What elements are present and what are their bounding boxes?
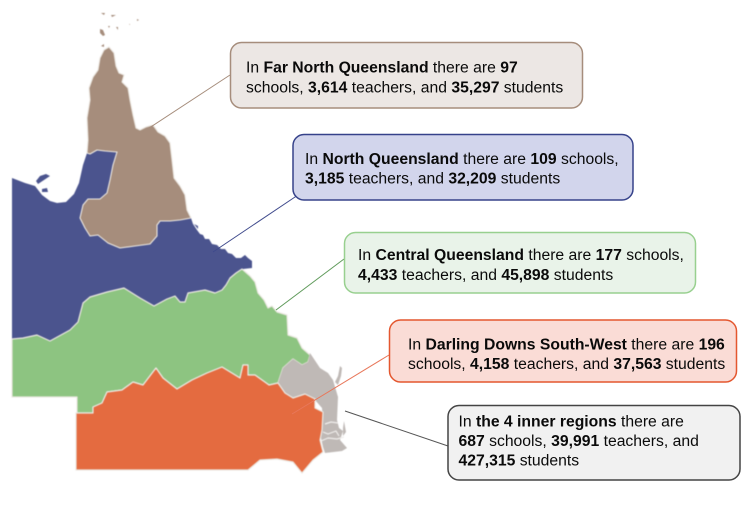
callout: Far North Queensland xyxy=(230,42,582,108)
leader line: the 4 inner regions xyxy=(345,411,448,446)
callout: Darling Downs South-West: In Darling Downs South-West there are 196 xyxy=(408,336,725,354)
region: Central Queensland xyxy=(12,269,310,413)
leader line: Far North Queensland xyxy=(140,75,230,134)
callout: Darling Downs South-West xyxy=(390,320,736,382)
region: Darling Downs South-West xyxy=(76,365,323,473)
callout: the 4 inner regions xyxy=(448,406,740,480)
map of Queensland xyxy=(12,13,347,473)
region: the 4 inner regions xyxy=(278,353,347,453)
callout: North Queensland: In North Queensland there are 109 schools, xyxy=(305,151,619,168)
callout: the 4 inner regions: In the 4 inner regions there are xyxy=(458,414,684,430)
callout: North Queensland: 3,185 teachers, and 32,209 students xyxy=(305,170,560,188)
callout: Central Queensland: 4,433 teachers, and 45,898 students xyxy=(358,267,613,284)
region: North Queensland xyxy=(12,150,252,341)
callout: the 4 inner regions: 427,315 students xyxy=(458,452,579,470)
callout: Central Queensland: In Central Queensland there are 177 schools, xyxy=(358,247,684,264)
callout: North Queensland xyxy=(293,134,633,200)
callout: Central Queensland xyxy=(344,232,696,293)
leader line: Darling Downs South-West xyxy=(292,355,389,414)
callout: Far North Queensland: In Far North Queensland there are 97 xyxy=(246,60,518,76)
leader line: Central Queensland xyxy=(276,259,344,310)
callout: Darling Downs South-West: schools, 4,158 teachers, and 37,563 students xyxy=(408,356,725,373)
leader line: North Queensland xyxy=(213,195,298,252)
callout: the 4 inner regions: 687 schools, 39,991 teachers, and xyxy=(458,433,699,450)
region: Far North Queensland xyxy=(80,13,191,248)
callout: Far North Queensland: schools, 3,614 teachers, and 35,297 students xyxy=(246,80,563,96)
